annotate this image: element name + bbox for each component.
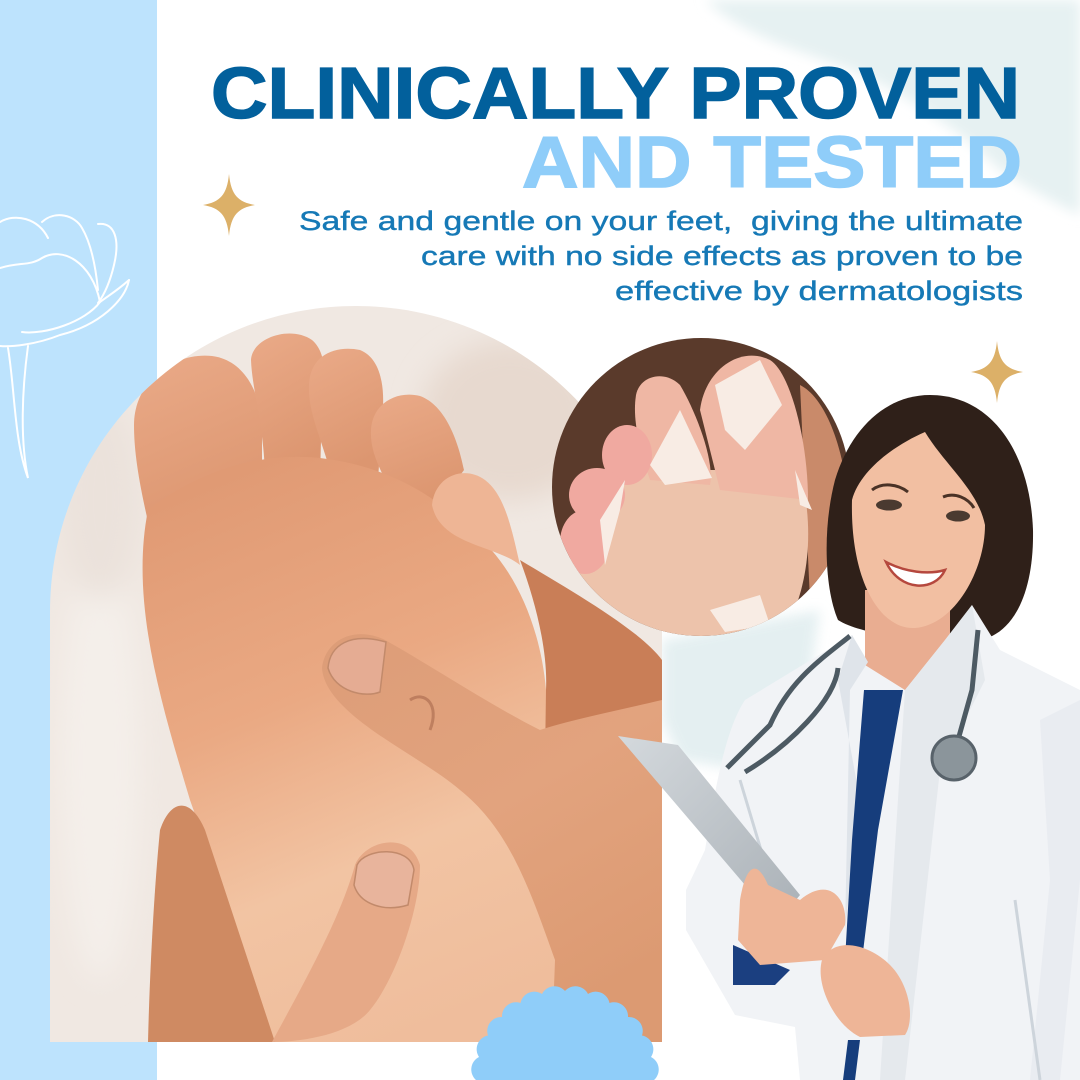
icon: gold sparkle right <box>971 341 1023 403</box>
navy lower shirt <box>843 1040 860 1080</box>
title line 2: AND TESTED <box>522 123 1022 203</box>
hands <box>738 869 845 965</box>
supporting hand right <box>322 560 662 1042</box>
foot ball <box>570 470 808 640</box>
little toe <box>432 473 520 565</box>
subtitle text <box>299 206 1023 306</box>
clipboard <box>618 736 800 925</box>
eyebrows <box>872 485 974 508</box>
stethoscope <box>727 630 978 772</box>
face <box>852 432 985 628</box>
photo: peeling toes circle <box>552 338 851 640</box>
title line 1: CLINICALLY PROVEN <box>211 54 1020 134</box>
navy top <box>845 690 903 960</box>
neighbouring toe <box>800 385 842 589</box>
subtitle text: Safe and gentle on your feet, giving the ultimate <box>299 206 1023 236</box>
supporting hand left and thumb <box>148 806 420 1042</box>
title <box>211 54 1022 203</box>
coat shading <box>838 605 1080 1080</box>
illustration: doctor <box>618 395 1080 1080</box>
navy sleeve <box>733 945 790 985</box>
toes <box>134 334 464 517</box>
smile <box>886 562 945 586</box>
fourth toe <box>371 395 464 510</box>
watercolor wash: top right <box>705 0 1080 215</box>
peeling skin flakes <box>600 360 812 632</box>
toes <box>560 356 808 574</box>
fingernail <box>328 639 386 694</box>
subtitle text: care with no side effects as proven to be <box>421 241 1023 271</box>
icon: gold sparkle left <box>203 174 255 236</box>
watercolor wash: behind doctor <box>662 610 820 770</box>
white coat <box>686 605 1080 1080</box>
stethoscope chestpiece <box>932 736 976 780</box>
second toe <box>251 334 322 460</box>
icon: flower outline <box>0 215 129 478</box>
decorative blue scalloped badge <box>471 986 659 1080</box>
sole of foot <box>143 457 560 1042</box>
eyes <box>876 500 970 522</box>
photo: foot in arch frame <box>50 306 662 1042</box>
big toe <box>134 356 262 517</box>
subtitle text: effective by dermatologists <box>615 276 1023 306</box>
towel background <box>50 306 662 1042</box>
panel: left blue strip <box>0 0 157 1080</box>
third toe <box>321 348 384 472</box>
back hair <box>827 395 1033 638</box>
neck <box>865 590 950 720</box>
